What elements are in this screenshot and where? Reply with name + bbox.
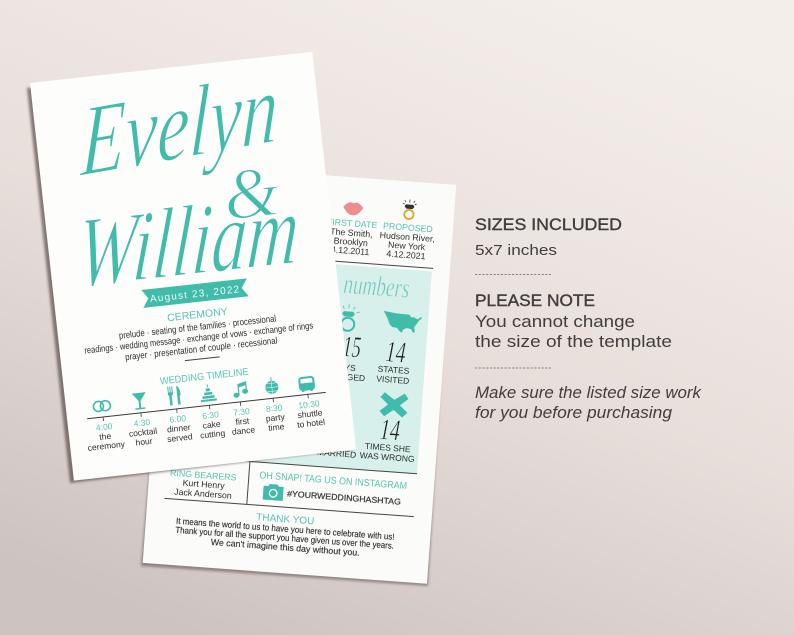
divider: [183, 250, 433, 268]
stop: cocktail hour: hour: [135, 436, 153, 448]
dashed separator: [475, 367, 551, 369]
icon: music note: [232, 381, 249, 398]
heading: thank you: THANK YOU: [256, 512, 315, 527]
size value: 5x7 inches: [475, 242, 557, 259]
title: ampersand: &: [219, 150, 284, 236]
stop: dinner served: dinner: [166, 422, 191, 435]
stop: cake cutting: cake: [202, 419, 221, 431]
title: William: William: [75, 172, 303, 309]
stop: the ceremony: the: [99, 431, 112, 442]
back card shadow: [141, 172, 452, 586]
title: Evelyn: Evelyn: [78, 50, 280, 198]
stop: dinner served: [165, 412, 193, 444]
label: times she was wrong: WAS WRONG: [359, 450, 415, 464]
timeline axis: [87, 392, 326, 419]
label: days engaged: DAYS: [333, 361, 356, 373]
icon: disco ball: [264, 377, 279, 394]
divider: [247, 462, 250, 504]
names: Jack Anderson: [174, 487, 232, 501]
stat: states: 14: [385, 335, 407, 370]
divider: [185, 357, 220, 361]
label: days engaged: ENGAGED: [322, 370, 365, 383]
thank you message: Thank you for all the support you have given us over the years.: [175, 525, 394, 551]
stop: first dance: 7:30: [233, 406, 250, 418]
location details: Hudson River,: [379, 230, 435, 244]
label: times she was wrong: TIMES SHE: [365, 441, 411, 454]
icon: cross: [379, 392, 409, 418]
heading: sizes included: SIZES INCLUDED: [475, 215, 622, 234]
stop: party time: 8:30: [265, 402, 283, 414]
stop: shuttle to hotel: 10:30: [298, 398, 320, 410]
panel: back of card: [143, 164, 456, 584]
icon: gold ring: [402, 199, 417, 220]
stop: the ceremony: ceremony: [87, 439, 126, 453]
heading: instagram: OH SNAP! TAG US ON INSTAGRAM: [259, 470, 407, 492]
stop: cake cutting: [198, 409, 226, 440]
venue details: The Smith,: [330, 226, 373, 239]
front card shadow: [27, 60, 354, 483]
label: married: MARRIED: [317, 447, 357, 460]
stop: dinner served: served: [167, 431, 193, 444]
date ribbon: [141, 278, 249, 308]
stop: cake cutting: cutting: [200, 428, 226, 440]
stop: first dance: first: [235, 416, 250, 427]
card sheet: [30, 52, 356, 481]
heading: proposed: PROPOSED: [383, 221, 433, 234]
icon: lips: [343, 202, 364, 216]
stop: party time: party: [265, 412, 285, 424]
icon: camera: [263, 484, 284, 501]
ticks: [103, 394, 308, 421]
card sheet: [143, 164, 456, 584]
stop: cocktail hour: [127, 416, 159, 448]
location details: 4.12.2021: [386, 248, 426, 261]
stop: shuttle to hotel: shuttle: [297, 407, 323, 420]
timeline stops: [85, 398, 326, 453]
stop: party time: [264, 402, 287, 433]
stop: shuttle to hotel: [295, 398, 326, 430]
stop: party time: time: [268, 421, 285, 433]
icon: usa map: [382, 311, 422, 334]
stop: dinner served: 6:00: [169, 413, 187, 425]
stop: first dance: dance: [231, 424, 256, 437]
proposed: [378, 220, 436, 262]
icon: cutlery: [167, 385, 182, 406]
panel: the numbers: [168, 253, 432, 474]
ceremony order of service: prayer · presentation of couple · recessional: [125, 335, 278, 362]
label: states visited: STATES: [377, 364, 410, 376]
note text: the size of the template: [475, 332, 672, 351]
label: states visited: VISITED: [376, 374, 410, 386]
venue details: Brooklyn: [333, 236, 368, 248]
stop: the ceremony: 4:00: [95, 421, 113, 433]
ceremony order of service: readings · wedding message · exchange of vows · exchange of rings: [84, 320, 314, 356]
names: Kurt Henry: [182, 478, 225, 491]
location details: New York: [388, 240, 426, 252]
thank you message: It means the world to us to have you here to celebrate with us!: [176, 516, 395, 542]
stop: cake cutting: 6:30: [202, 409, 220, 421]
icon: cake: [199, 384, 217, 402]
heading: please note: PLEASE NOTE: [475, 291, 595, 310]
stop: first dance: [229, 406, 256, 437]
purchase reminder: for you before purchasing: [475, 404, 673, 422]
ring bearers: [168, 468, 237, 501]
note text: You cannot change: [475, 312, 635, 331]
heading: first date: FIRST DATE: [327, 217, 378, 230]
stop: the ceremony: [85, 420, 126, 453]
heading: ring bearers: RING BEARERS: [170, 468, 237, 483]
date: August 23, 2022: [149, 284, 241, 305]
stat: years: '15: [338, 330, 362, 364]
heading: wedding timeline: WEDDING TIMELINE: [159, 367, 249, 387]
side notes: [475, 215, 702, 422]
icon: rings: [93, 400, 111, 412]
hashtag: #YOURWEDDINGHASHTAG: [287, 488, 401, 507]
stat: times wrong: 14: [379, 413, 401, 447]
stop: shuttle to hotel: to hotel: [297, 417, 326, 430]
divider: [168, 455, 417, 474]
thank you message: We can't imagine this day without you.: [210, 537, 360, 558]
venue details: 4.12.2011: [331, 244, 370, 257]
dashed separator: [475, 274, 551, 276]
purchase reminder: Make sure the listed size work: [475, 384, 702, 402]
stop: cocktail hour: 4:30: [133, 417, 151, 429]
panel: front of card: [30, 52, 356, 481]
heading: ceremony: CEREMONY: [167, 306, 228, 324]
icon: diamond ring: [336, 304, 360, 332]
first date: [325, 217, 378, 258]
icon: bus: [299, 377, 314, 392]
stop: cocktail hour: cocktail: [128, 426, 158, 439]
icon: cocktail: [132, 392, 147, 410]
heading: numbers: numbers: [343, 269, 411, 305]
ceremony order of service: prelude · seating of the families · processional: [118, 313, 277, 341]
divider: [164, 498, 414, 517]
